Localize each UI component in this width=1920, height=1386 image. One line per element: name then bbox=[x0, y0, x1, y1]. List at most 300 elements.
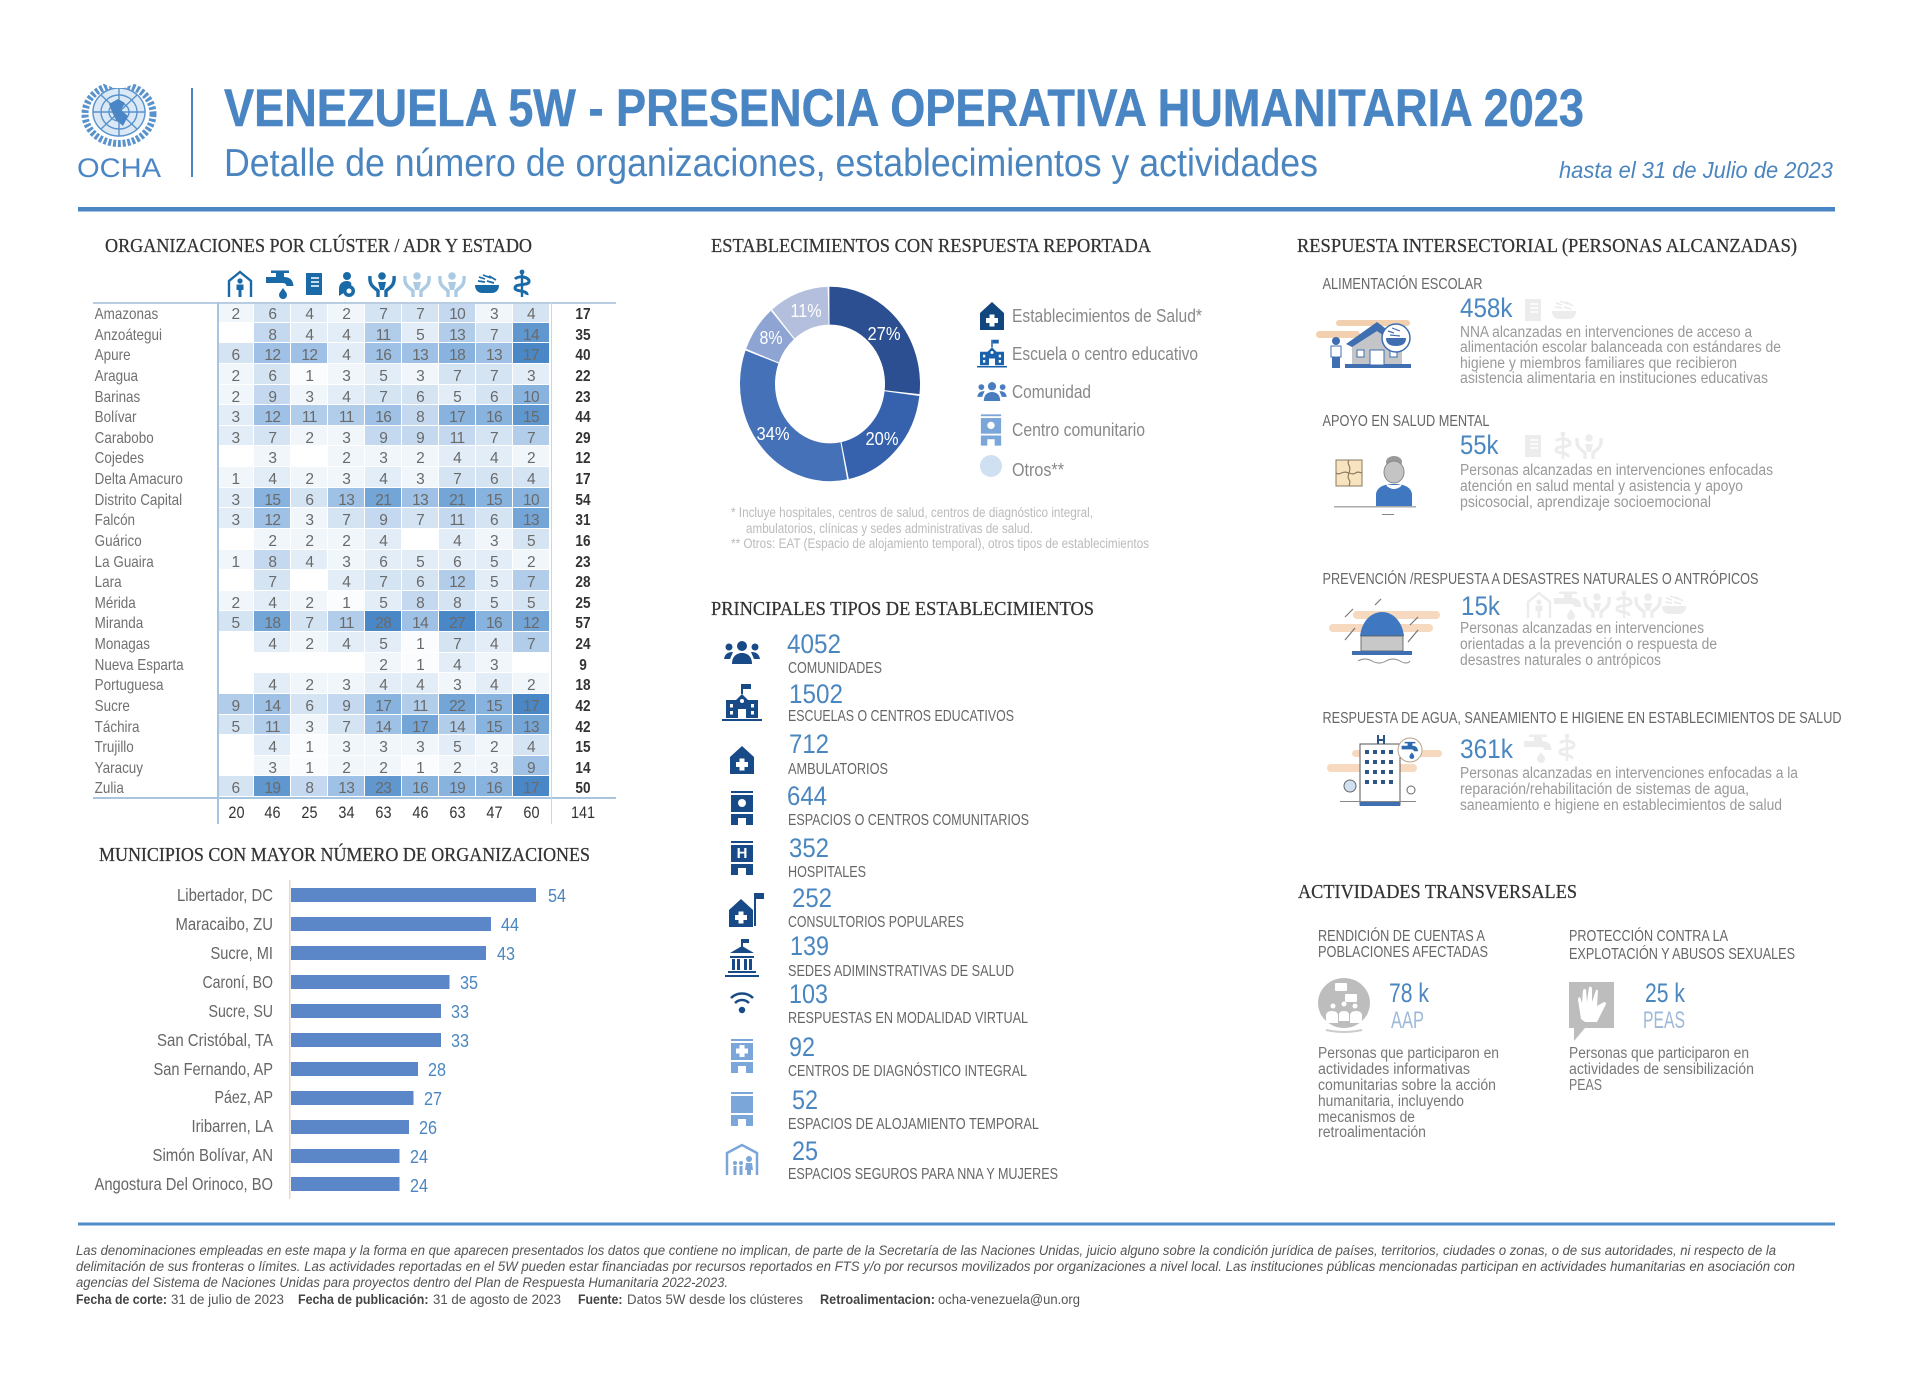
heatmap: organizaciones por estado y cluster: 2 bbox=[268, 533, 276, 550]
heatmap: organizaciones por estado y cluster: 6 bbox=[268, 368, 276, 385]
donut notes: * Incluye hospitales, centros de salud, centros de diagnóstico integral, bbox=[731, 505, 1093, 520]
bar chart: municipios: Simón Bolívar, AN bbox=[152, 1145, 273, 1165]
heatmap: organizaciones por estado y cluster: 6 bbox=[231, 780, 239, 797]
heatmap: organizaciones por estado y cluster: 1 bbox=[305, 760, 313, 777]
block: desastres: Personas alcanzadas en intervenciones bbox=[1460, 620, 1704, 637]
heatmap: organizaciones por estado y cluster: 12 bbox=[575, 450, 590, 467]
donut chart: 20% bbox=[866, 428, 898, 449]
heatmap: organizaciones por estado y cluster: 2 bbox=[342, 450, 350, 467]
heatmap: organizaciones por estado y cluster: 4 bbox=[490, 450, 498, 467]
list: tipos de establecimientos: CENTROS DE DIAGNÓSTICO INTEGRAL bbox=[788, 1063, 1027, 1080]
block: proteccion PEAS: Personas que participaron en bbox=[1569, 1045, 1749, 1062]
heatmap: organizaciones por estado y cluster: 57 bbox=[575, 615, 590, 632]
list: tipos de establecimientos: ESPACIOS DE ALOJAMIENTO TEMPORAL bbox=[788, 1116, 1039, 1133]
heatmap: organizaciones por estado y cluster: 3 bbox=[342, 554, 350, 570]
heatmap: organizaciones por estado y cluster: 7 bbox=[453, 471, 461, 488]
bar chart: municipios: San Fernando, AP bbox=[154, 1059, 273, 1079]
heatmap: organizaciones por estado y cluster: Trujillo bbox=[95, 739, 134, 756]
illustration: school feeding bbox=[1316, 320, 1411, 368]
heatmap: organizaciones por estado y cluster: 3 bbox=[305, 718, 313, 736]
logo: OCHA bbox=[77, 80, 161, 183]
heatmap: organizaciones por estado y cluster: 5 bbox=[453, 388, 461, 406]
footer: disclaimer bbox=[76, 1243, 1795, 1307]
heatmap: organizaciones por estado y cluster: 4 bbox=[342, 347, 350, 364]
heatmap: organizaciones por estado y cluster: Monagas bbox=[95, 636, 150, 653]
legend: donut: Centro comunitario bbox=[1012, 420, 1145, 440]
heatmap: organizaciones por estado y cluster: 11 bbox=[450, 430, 465, 447]
block: alimentacion escolar: higiene y miembros familiares que recibieron bbox=[1460, 355, 1737, 372]
heatmap: organizaciones por estado y cluster: 14 bbox=[575, 760, 590, 777]
heatmap: organizaciones por estado y cluster: 46 bbox=[265, 803, 281, 822]
legend: donut: Escuela o centro educativo bbox=[1012, 344, 1198, 364]
heatmap: organizaciones por estado y cluster: 54 bbox=[575, 492, 590, 509]
heatmap: organizaciones por estado y cluster: 7 bbox=[342, 718, 350, 736]
heatmap: organizaciones por estado y cluster: 28 bbox=[375, 615, 391, 632]
heatmap: organizaciones por estado y cluster: 3 bbox=[342, 471, 350, 488]
heatmap: organizaciones por estado y cluster: Cojedes bbox=[95, 450, 144, 467]
heatmap: organizaciones por estado y cluster: 3 bbox=[490, 533, 498, 550]
heatmap: organizaciones por estado y cluster: Anzoátegui bbox=[95, 327, 162, 344]
block: desastres: desastres naturales o antrópicos bbox=[1460, 652, 1661, 669]
legend: donut: Comunidad bbox=[1012, 382, 1091, 402]
heatmap: organizaciones por estado y cluster: 5 bbox=[416, 327, 424, 344]
list: tipos de establecimientos: 25 bbox=[792, 1136, 818, 1166]
heatmap: organizaciones por estado y cluster: 13 bbox=[523, 718, 539, 736]
bar chart: municipios: 24 bbox=[410, 1147, 428, 1167]
illustration: hospital building bbox=[1327, 735, 1442, 806]
heatmap: organizaciones por estado y cluster: 4 bbox=[490, 677, 498, 694]
donut chart bbox=[756, 300, 902, 462]
heatmap: organizaciones por estado y cluster: 3 bbox=[342, 677, 350, 694]
heatmap: organizaciones por estado y cluster: 22 bbox=[449, 698, 465, 715]
block: desastres: PREVENCIÓN /RESPUESTA A DESASTRES NATURALES O ANTRÓPICOS bbox=[1322, 571, 1758, 588]
heatmap: organizaciones por estado y cluster: Portuguesa bbox=[95, 677, 163, 694]
heatmap: organizaciones por estado y cluster: 15 bbox=[523, 409, 539, 426]
heatmap: organizaciones por estado y cluster: 7 bbox=[527, 430, 535, 447]
heatmap: organizaciones por estado y cluster: 18 bbox=[575, 677, 590, 694]
heatmap: organizaciones por estado y cluster: 4 bbox=[268, 471, 276, 488]
block: rendicion de cuentas bbox=[1318, 928, 1499, 1141]
heatmap: organizaciones por estado y cluster: 5 bbox=[490, 574, 498, 591]
donut notes bbox=[731, 505, 1149, 551]
list: tipos de establecimientos: 712 bbox=[789, 729, 829, 759]
heatmap: organizaciones por estado y cluster: Táchira bbox=[95, 718, 140, 736]
heatmap: organizaciones por estado y cluster: 5 bbox=[490, 595, 498, 612]
footer: disclaimer: 31 de julio de 2023 bbox=[171, 1292, 284, 1307]
heatmap: organizaciones por estado y cluster: 2 bbox=[231, 368, 239, 385]
heatmap: organizaciones por estado y cluster: 6 bbox=[490, 388, 498, 406]
donut chart: 34% bbox=[756, 423, 790, 444]
heatmap: organizaciones por estado y cluster: 17 bbox=[575, 306, 590, 323]
heatmap: organizaciones por estado y cluster: 4 bbox=[268, 595, 276, 612]
legend: donut bbox=[977, 302, 1202, 480]
block: salud mental: 55k bbox=[1460, 430, 1499, 460]
heatmap: organizaciones por estado y cluster: 16 bbox=[575, 533, 590, 550]
heatmap: organizaciones por estado y cluster: 29 bbox=[575, 430, 590, 447]
heatmap: organizaciones por estado y cluster: 4 bbox=[379, 677, 387, 694]
heatmap: organizaciones por estado y cluster: 12 bbox=[264, 409, 280, 426]
heatmap: organizaciones por estado y cluster: 1 bbox=[416, 760, 424, 777]
heatmap: organizaciones por estado y cluster: 8 bbox=[453, 595, 461, 612]
heatmap: organizaciones por estado y cluster: 10 bbox=[523, 492, 539, 509]
bar chart: municipios: 24 bbox=[410, 1176, 428, 1196]
bar chart: municipios: 27 bbox=[424, 1089, 442, 1109]
block: proteccion PEAS: 25 k bbox=[1645, 978, 1685, 1008]
block: salud mental: psicosocial, aprendizaje socioemocional bbox=[1460, 494, 1711, 511]
bar chart: municipios: 33 bbox=[451, 1002, 469, 1022]
heatmap: organizaciones por estado y cluster: 3 bbox=[416, 471, 424, 488]
heatmap: organizaciones por estado y cluster: Miranda bbox=[95, 615, 143, 632]
heatmap: organizaciones por estado y cluster: 6 bbox=[490, 471, 498, 488]
heatmap: organizaciones por estado y cluster: 4 bbox=[527, 739, 535, 756]
bar chart: municipios: Iribarren, LA bbox=[192, 1116, 273, 1136]
heatmap: organizaciones por estado y cluster: 25 bbox=[302, 803, 318, 822]
bar chart: municipios: Páez, AP bbox=[214, 1087, 273, 1107]
heatmap: organizaciones por estado y cluster: 13 bbox=[523, 512, 539, 529]
heatmap: organizaciones por estado y cluster: 2 bbox=[305, 595, 313, 612]
heatmap: organizaciones por estado y cluster: 6 bbox=[416, 388, 424, 406]
heatmap: organizaciones por estado y cluster: 63 bbox=[450, 803, 466, 822]
heatmap: organizaciones por estado y cluster: 2 bbox=[305, 636, 313, 653]
list: tipos de establecimientos: CONSULTORIOS POPULARES bbox=[788, 914, 964, 931]
heatmap: organizaciones por estado y cluster: 7 bbox=[453, 636, 461, 653]
heading: principales tipos: PRINCIPALES TIPOS DE ESTABLECIMIENTOS bbox=[711, 598, 1094, 620]
heatmap: organizaciones por estado y cluster: Aragua bbox=[95, 368, 138, 385]
faded icons bbox=[1528, 591, 1686, 620]
block: agua y saneamiento bbox=[1322, 710, 1842, 814]
list: tipos de establecimientos: 4052 bbox=[787, 629, 841, 659]
heatmap: organizaciones por estado y cluster: 46 bbox=[413, 803, 429, 822]
heatmap: organizaciones por estado y cluster: 2 bbox=[453, 760, 461, 777]
heatmap: organizaciones por estado y cluster: 8 bbox=[268, 327, 276, 344]
list: tipos de establecimientos: 1502 bbox=[789, 679, 843, 709]
block: rendicion de cuentas: mecanismos de bbox=[1318, 1109, 1415, 1126]
heatmap: organizaciones por estado y cluster: 1 bbox=[305, 368, 313, 385]
heatmap: organizaciones por estado y cluster: 5 bbox=[231, 718, 239, 736]
footer: disclaimer: agencias del Sistema de Naciones Unidas para proyectos dentro del Plan de Respuesta Humanitaria 2022-2023. bbox=[76, 1275, 728, 1290]
heatmap: organizaciones por estado y cluster: 4 bbox=[453, 450, 461, 467]
heatmap: organizaciones por estado y cluster: 3 bbox=[527, 368, 535, 385]
list: tipos de establecimientos: SEDES ADIMINSTRATIVAS DE SALUD bbox=[788, 963, 1014, 980]
heatmap: organizaciones por estado y cluster: 3 bbox=[231, 430, 239, 447]
heatmap: organizaciones por estado y cluster: 2 bbox=[342, 306, 350, 323]
heatmap: organizaciones por estado y cluster: 3 bbox=[342, 430, 350, 447]
block: proteccion PEAS: EXPLOTACIÓN Y ABUSOS SEXUALES bbox=[1569, 946, 1795, 963]
heatmap: organizaciones por estado y cluster: 2 bbox=[416, 450, 424, 467]
heatmap: organizaciones por estado y cluster: 4 bbox=[453, 533, 461, 550]
heatmap: organizaciones por estado y cluster: 22 bbox=[575, 368, 590, 385]
heatmap: organizaciones por estado y cluster: 7 bbox=[268, 430, 276, 447]
heatmap: organizaciones por estado y cluster: 5 bbox=[453, 739, 461, 756]
heatmap: organizaciones por estado y cluster: 4 bbox=[453, 657, 461, 674]
heatmap: organizaciones por estado y cluster: 6 bbox=[231, 347, 239, 364]
heatmap: organizaciones por estado y cluster: 8 bbox=[305, 780, 313, 797]
list: tipos de establecimientos: 103 bbox=[789, 979, 828, 1009]
faded icons bbox=[1524, 734, 1574, 763]
heatmap: organizaciones por estado y cluster: 15 bbox=[575, 739, 590, 756]
heatmap: organizaciones por estado y cluster: 16 bbox=[486, 409, 502, 426]
heatmap: organizaciones por estado y cluster: 6 bbox=[268, 306, 276, 323]
heatmap: organizaciones por estado y cluster: 3 bbox=[490, 306, 498, 323]
heatmap: organizaciones por estado y cluster: 3 bbox=[342, 739, 350, 756]
heatmap: organizaciones por estado y cluster: 4 bbox=[342, 574, 350, 591]
heatmap: organizaciones por estado y cluster: 5 bbox=[379, 368, 387, 385]
heatmap: organizaciones por estado y cluster: 28 bbox=[575, 574, 590, 591]
heatmap: organizaciones por estado y cluster: 4 bbox=[342, 636, 350, 653]
heatmap: organizaciones por estado y cluster: 18 bbox=[264, 615, 280, 632]
heatmap: organizaciones por estado y cluster: 12 bbox=[523, 615, 539, 632]
heatmap: organizaciones por estado y cluster: 13 bbox=[338, 780, 354, 797]
footer: disclaimer: Fecha de corte: bbox=[76, 1292, 167, 1307]
list: tipos de establecimientos: COMUNIDADES bbox=[788, 660, 882, 677]
block: desastres bbox=[1322, 571, 1758, 669]
heatmap: organizaciones por estado y cluster: Guárico bbox=[95, 533, 142, 550]
heatmap: organizaciones por estado y cluster: 19 bbox=[449, 780, 465, 797]
heatmap: organizaciones por estado y cluster: 7 bbox=[416, 306, 424, 323]
block: agua y saneamiento: Personas alcanzadas en intervenciones enfocadas a la bbox=[1460, 765, 1798, 782]
heatmap: organizaciones por estado y cluster: 6 bbox=[416, 574, 424, 591]
heatmap: organizaciones por estado y cluster: 6 bbox=[490, 512, 498, 529]
heatmap: organizaciones por estado y cluster: 23 bbox=[575, 554, 590, 570]
heatmap: organizaciones por estado y cluster: Carabobo bbox=[95, 430, 154, 447]
heatmap: organizaciones por estado y cluster: 47 bbox=[486, 803, 503, 822]
heatmap column icons bbox=[229, 270, 529, 299]
heatmap: organizaciones por estado y cluster: 8 bbox=[268, 554, 276, 570]
heatmap: organizaciones por estado y cluster: 2 bbox=[231, 388, 239, 406]
heatmap: organizaciones por estado y cluster: 4 bbox=[527, 306, 535, 323]
heatmap: organizaciones por estado y cluster: 17 bbox=[523, 347, 539, 364]
heatmap: organizaciones por estado y cluster: 23 bbox=[575, 388, 590, 406]
list: tipos de establecimientos: ESPACIOS O CENTROS COMUNITARIOS bbox=[788, 812, 1029, 829]
heatmap: organizaciones por estado y cluster: 3 bbox=[268, 450, 276, 467]
heatmap: organizaciones por estado y cluster: 2 bbox=[305, 533, 313, 550]
heatmap: organizaciones por estado y cluster: 4 bbox=[342, 388, 350, 406]
bar chart: municipios: Caroní, BO bbox=[202, 972, 273, 992]
list: tipos de establecimientos: 52 bbox=[792, 1085, 818, 1115]
block: rendicion de cuentas: Personas que participaron en bbox=[1318, 1045, 1499, 1062]
list: tipos de establecimientos: ESPACIOS SEGUROS PARA NNA Y MUJERES bbox=[788, 1166, 1058, 1183]
heatmap: organizaciones por estado y cluster: 2 bbox=[342, 760, 350, 777]
heatmap: organizaciones por estado y cluster: La Guaira bbox=[95, 554, 154, 570]
block: alimentacion escolar: asistencia alimentaria en instituciones educativas bbox=[1460, 370, 1768, 387]
heatmap: organizaciones por estado y cluster: 14 bbox=[449, 718, 465, 736]
heatmap: organizaciones por estado y cluster: 2 bbox=[305, 430, 313, 447]
heatmap: organizaciones por estado y cluster: 5 bbox=[379, 595, 387, 612]
heatmap: organizaciones por estado y cluster: 7 bbox=[527, 574, 535, 591]
heatmap: organizaciones por estado y cluster: 40 bbox=[575, 347, 590, 364]
heatmap: organizaciones por estado y cluster: 2 bbox=[305, 471, 313, 488]
heatmap: organizaciones por estado y cluster: 9 bbox=[379, 512, 387, 529]
heatmap: organizaciones por estado y cluster: Sucre bbox=[95, 698, 130, 715]
heatmap: organizaciones por estado y cluster: 2 bbox=[305, 677, 313, 694]
heading: respuesta intersectorial: RESPUESTA INTERSECTORIAL (PERSONAS ALCANZADAS) bbox=[1297, 235, 1797, 257]
heatmap: organizaciones por estado y cluster: 7 bbox=[490, 430, 498, 447]
list: tipos de establecimientos: 352 bbox=[789, 833, 829, 863]
heatmap: organizaciones por estado y cluster: 17 bbox=[575, 471, 590, 488]
heatmap: organizaciones por estado y cluster: 10 bbox=[523, 388, 539, 406]
heatmap: organizaciones por estado y cluster: 17 bbox=[523, 780, 539, 797]
block: rendicion de cuentas: RENDICIÓN DE CUENTAS A bbox=[1318, 928, 1486, 945]
heatmap: organizaciones por estado y cluster: 3 bbox=[490, 657, 498, 674]
heatmap: organizaciones por estado y cluster: 6 bbox=[305, 698, 313, 715]
heatmap: organizaciones por estado y cluster: 9 bbox=[342, 698, 350, 715]
bar chart: municipios: Libertador, DC bbox=[177, 885, 273, 905]
bar chart: municipios: 26 bbox=[419, 1118, 437, 1138]
list: tipos de establecimientos: HOSPITALES bbox=[788, 864, 866, 881]
heatmap: organizaciones por estado y cluster: 14 bbox=[375, 718, 391, 736]
heatmap: organizaciones por estado y cluster: 4 bbox=[379, 471, 387, 488]
heatmap: organizaciones por estado y cluster: 3 bbox=[416, 739, 424, 756]
heatmap: organizaciones por estado y cluster: 34 bbox=[339, 803, 355, 822]
icon: community dialogue bbox=[1318, 978, 1370, 1032]
heatmap: organizaciones por estado y cluster: Barinas bbox=[95, 388, 140, 406]
heatmap: organizaciones por estado y cluster: 11 bbox=[376, 327, 391, 344]
heatmap: organizaciones por estado y cluster: 11 bbox=[265, 718, 280, 736]
block: rendicion de cuentas: humanitaria, incluyendo bbox=[1318, 1093, 1464, 1110]
heatmap: organizaciones por estado y cluster: 2 bbox=[231, 595, 239, 612]
heatmap: organizaciones por estado y cluster: 18 bbox=[449, 347, 465, 364]
heatmap: organizaciones por estado y cluster: 25 bbox=[575, 595, 590, 612]
heatmap: organizaciones por estado y cluster: 4 bbox=[379, 533, 387, 550]
illustration: person and puzzle bbox=[1334, 456, 1416, 515]
bar chart: municipios: 43 bbox=[497, 944, 515, 964]
block: proteccion PEAS: PEAS bbox=[1643, 1007, 1685, 1034]
faded icons bbox=[1525, 299, 1576, 321]
list: tipos de establecimientos: H bbox=[737, 845, 747, 862]
bar chart: municipios: Sucre, MI bbox=[210, 943, 273, 963]
heatmap: organizaciones por estado y cluster: 7 bbox=[342, 512, 350, 529]
icon: stop hand bbox=[1569, 982, 1614, 1041]
heatmap: organizaciones por estado y cluster: 4 bbox=[342, 327, 350, 344]
heatmap: organizaciones por estado y cluster: 8 bbox=[416, 409, 424, 426]
heatmap: organizaciones por estado y cluster: 42 bbox=[575, 698, 590, 715]
block: rendicion de cuentas: actividades informativas bbox=[1318, 1061, 1470, 1078]
donut chart: 27% bbox=[868, 323, 900, 344]
bar chart: municipios: 44 bbox=[501, 915, 519, 935]
faded icons bbox=[1525, 432, 1601, 459]
heatmap: organizaciones por estado y cluster: 3 bbox=[305, 512, 313, 529]
block: proteccion PEAS: PEAS bbox=[1569, 1077, 1602, 1094]
heatmap: organizaciones por estado y cluster: 141 bbox=[571, 803, 595, 822]
heatmap: organizaciones por estado y cluster: 35 bbox=[575, 327, 590, 344]
heatmap: organizaciones por estado y cluster: 44 bbox=[575, 409, 590, 426]
heatmap: organizaciones por estado y cluster: 20 bbox=[228, 803, 244, 822]
heatmap: organizaciones por estado y cluster: 31 bbox=[575, 512, 590, 529]
bar chart: municipios: Sucre, SU bbox=[208, 1001, 273, 1021]
heatmap: organizaciones por estado y cluster: 7 bbox=[490, 368, 498, 385]
bar chart: municipios: Angostura Del Orinoco, BO bbox=[94, 1174, 273, 1194]
heatmap: organizaciones por estado y cluster: 4 bbox=[305, 306, 313, 323]
bar chart: municipios: 35 bbox=[460, 973, 478, 993]
footer: disclaimer: Fuente: bbox=[578, 1292, 622, 1307]
donut chart: 11% bbox=[790, 300, 822, 321]
footer: disclaimer: ocha-venezuela@un.org bbox=[938, 1292, 1080, 1307]
heatmap: organizaciones por estado y cluster: 3 bbox=[453, 677, 461, 694]
heatmap: organizaciones por estado y cluster: 7 bbox=[305, 615, 313, 632]
bar chart: municipios: 33 bbox=[451, 1031, 469, 1051]
bar chart: municipios: 54 bbox=[548, 886, 566, 906]
heatmap: organizaciones por estado y cluster: 21 bbox=[449, 492, 465, 509]
heatmap: organizaciones por estado y cluster: Bolívar bbox=[95, 409, 137, 426]
heatmap: organizaciones por estado y cluster: 7 bbox=[379, 388, 387, 406]
heatmap: organizaciones por estado y cluster: 16 bbox=[412, 780, 428, 797]
heatmap: organizaciones por estado y cluster: 3 bbox=[379, 739, 387, 756]
heatmap: organizaciones por estado y cluster: 11 bbox=[339, 615, 354, 632]
heatmap: organizaciones por estado y cluster: 8 bbox=[416, 595, 424, 612]
block: salud mental: APOYO EN SALUD MENTAL bbox=[1322, 413, 1490, 430]
heatmap: organizaciones por estado y cluster: 19 bbox=[264, 780, 280, 797]
heatmap: organizaciones por estado y cluster: 12 bbox=[449, 574, 465, 591]
heatmap: organizaciones por estado y cluster: 4 bbox=[490, 636, 498, 653]
heatmap: organizaciones por estado y cluster: 5 bbox=[416, 554, 424, 570]
heading: municipios: MUNICIPIOS CON MAYOR NÚMERO DE ORGANIZACIONES bbox=[99, 842, 590, 866]
footer: disclaimer: Datos 5W desde los clústeres bbox=[627, 1292, 803, 1307]
bar chart: municipios: 28 bbox=[428, 1060, 446, 1080]
heatmap: organizaciones por estado y cluster: 4 bbox=[305, 327, 313, 344]
block: desastres: 15k bbox=[1461, 591, 1500, 621]
heatmap: organizaciones por estado y cluster: 14 bbox=[264, 698, 280, 715]
heatmap: organizaciones por estado y cluster: 9 bbox=[416, 430, 424, 447]
list: tipos de establecimientos: AMBULATORIOS bbox=[788, 761, 888, 778]
block: rendicion de cuentas: retroalimentación bbox=[1318, 1124, 1426, 1141]
heatmap: organizaciones por estado y cluster: 4 bbox=[268, 739, 276, 756]
heading: actividades transversales: ACTIVIDADES TRANSVERSALES bbox=[1298, 881, 1577, 903]
heatmap: organizaciones por estado y cluster: 3 bbox=[231, 409, 239, 426]
subtitle: Detalle de número de organizaciones, establecimientos y actividades bbox=[224, 142, 1318, 185]
heatmap: organizaciones por estado y cluster: Lara bbox=[95, 574, 122, 591]
heatmap: organizaciones por estado y cluster: 15 bbox=[486, 698, 502, 715]
heatmap: organizaciones por estado y cluster: 27 bbox=[449, 615, 465, 632]
heatmap: organizaciones por estado y cluster: 1 bbox=[416, 636, 424, 653]
heading: establecimientos: ESTABLECIMIENTOS CON RESPUESTA REPORTADA bbox=[711, 235, 1152, 257]
heatmap: organizaciones por estado y cluster: 50 bbox=[575, 780, 590, 797]
heatmap: organizaciones por estado y cluster: 14 bbox=[412, 615, 428, 632]
heatmap: organizaciones por estado y cluster: 15 bbox=[264, 492, 280, 509]
heatmap: organizaciones por estado y cluster: 2 bbox=[231, 306, 239, 323]
block: alimentacion escolar: ALIMENTACIÓN ESCOLAR bbox=[1322, 276, 1482, 293]
footer: disclaimer: delimitación de sus fronteras o límites. Las actividades reportadas en el 5W pueden estar financiadas por recursos reportados en FTS y/o por recursos movilizados por organizaciones a nivel local. Las instituciones públicas mencionadas participan en actividades humanitarias en asociación con bbox=[76, 1259, 1795, 1274]
heatmap: organizaciones por estado y cluster: 17 bbox=[375, 698, 391, 715]
donut chart: 8% bbox=[760, 327, 782, 348]
heatmap: organizaciones por estado y cluster: 7 bbox=[527, 636, 535, 653]
heatmap: organizaciones por estado y cluster: Nueva Esparta bbox=[95, 657, 184, 674]
heatmap: organizaciones por estado y cluster: 1 bbox=[305, 739, 313, 756]
heatmap: organizaciones por estado y cluster: 9 bbox=[527, 760, 535, 777]
list: tipos de establecimientos bbox=[722, 629, 1058, 1183]
heatmap: organizaciones por estado y cluster: Falcón bbox=[95, 512, 135, 529]
heatmap: organizaciones por estado y cluster: 24 bbox=[575, 636, 590, 653]
heatmap: organizaciones por estado y cluster: 5 bbox=[527, 595, 535, 612]
heatmap: organizaciones por estado y cluster: 3 bbox=[231, 492, 239, 509]
heatmap: organizaciones por estado y cluster: 1 bbox=[231, 554, 239, 570]
block: rendicion de cuentas: POBLACIONES AFECTADAS bbox=[1318, 944, 1488, 961]
block: proteccion PEAS bbox=[1569, 928, 1795, 1094]
list: tipos de establecimientos: 139 bbox=[790, 931, 829, 961]
block: proteccion PEAS: actividades de sensibilización bbox=[1569, 1061, 1754, 1078]
heatmap: organizaciones por estado y cluster: 16 bbox=[375, 409, 391, 426]
block: alimentacion escolar: alimentación escolar balanceada con estándares de bbox=[1460, 339, 1781, 356]
heatmap: organizaciones por estado y cluster: 16 bbox=[375, 347, 391, 364]
heatmap: organizaciones por estado y cluster: Mérida bbox=[95, 595, 136, 612]
heatmap: organizaciones por estado y cluster: 11 bbox=[339, 409, 354, 426]
heatmap: organizaciones por estado y cluster: 15 bbox=[486, 718, 502, 736]
heatmap: organizaciones por estado y cluster: 7 bbox=[490, 327, 498, 344]
heatmap: organizaciones por estado y cluster: 5 bbox=[527, 533, 535, 550]
title: VENEZUELA 5W - PRESENCIA OPERATIVA HUMANITARIA 2023 bbox=[224, 79, 1584, 138]
bar chart: municipios bbox=[94, 880, 566, 1199]
block: salud mental bbox=[1322, 413, 1773, 515]
heatmap: organizaciones por estado y cluster: 3 bbox=[305, 388, 313, 406]
